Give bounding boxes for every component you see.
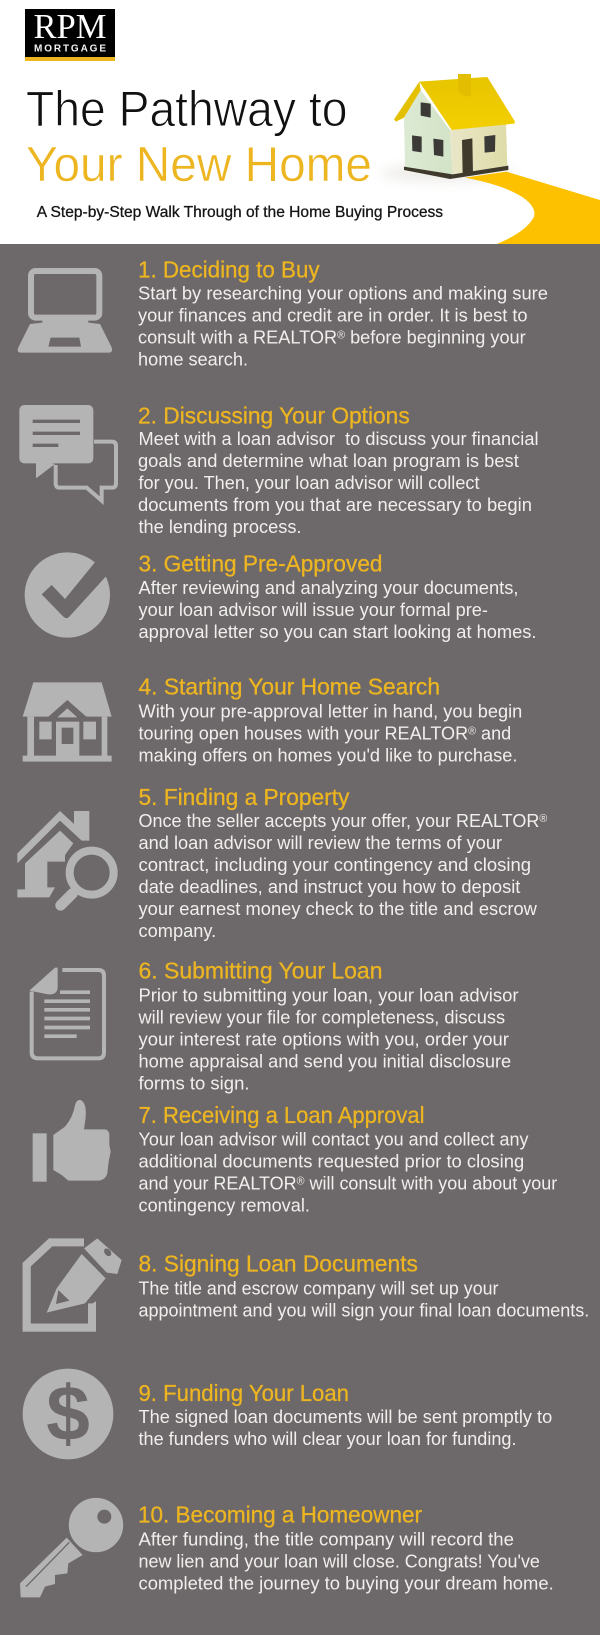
heading: 3. Getting Pre-Approved [138,551,382,577]
body text: and loan advisor will review the terms of your [138,832,502,853]
body text [138,1406,552,1449]
step 10: Becoming a Homeowner [20,1497,554,1597]
step 1: Deciding to Buy [18,256,548,369]
body text: home search. [138,348,248,369]
body text: Prior to submitting your loan, your loan advisor [138,984,518,1005]
heading: 6. Submitting Your Loan [138,958,382,984]
body text: will consult with you about your [305,1172,557,1193]
subtitle: A Step-by-Step Walk Through of the Home Buying Process [37,204,443,221]
body text [138,282,548,369]
body text: your loan advisor will issue your formal pre- [138,599,488,620]
body text: contract, including your contingency and closing [138,854,531,875]
icon: key [20,1497,124,1597]
body text [138,1528,554,1593]
panel: header [0,0,600,244]
body text: for you. Then, your loan advisor will collect [138,472,480,493]
body text: documents from you that are necessary to begin [138,494,532,515]
logo: RPM Mortgage [25,7,115,61]
body text [138,700,522,765]
step 5: Finding a Property [17,784,547,941]
body text: the lending process. [138,516,302,537]
body text: appointment and you will sign your final loan documents. [138,1299,589,1320]
body text: and your REALTOR [138,1172,301,1193]
body text: ® [297,1175,305,1187]
body text: consult with a REALTOR [138,326,341,347]
body text: and [476,722,511,743]
body text [138,1128,557,1215]
body text: your interest rate options with you, order your [138,1028,509,1049]
body text: Once the seller accepts your offer, your REALTOR [138,810,551,831]
step 6: Submitting Your Loan [29,958,519,1093]
body text: date deadlines, and instruct you how to deposit [138,876,520,897]
body text [138,984,518,1093]
body text: contingency removal. [138,1194,310,1215]
icon: speech bubbles [19,405,116,501]
title: The Pathway to [26,81,348,137]
body text: ® [539,813,547,825]
step 4: Starting Your Home Search [23,673,522,765]
body text: additional documents requested prior to closing [138,1150,524,1171]
icon: house [23,682,112,762]
title [26,81,372,192]
body text: company. [138,920,216,941]
heading: 4. Starting Your Home Search [138,673,440,699]
body text [138,1277,589,1320]
body text [138,577,536,642]
body text: Your loan advisor will contact you and collect any [138,1128,529,1149]
title: Your New Home [26,138,372,192]
icon: house with magnifier [17,811,114,905]
heading: 9. Funding Your Loan [138,1380,349,1406]
body text [138,428,538,537]
icon: dollar coin: $ [46,1369,90,1457]
icon: check mark circle [25,552,112,638]
illustration: yellow house on path [380,74,600,244]
body text: goals and determine what loan program is best [138,450,519,471]
body text: ® [337,329,345,341]
body text: will review your file for completeness, discuss [138,1006,505,1027]
body text: before beginning your [345,326,526,347]
heading: 1. Deciding to Buy [138,256,320,282]
step 3: Getting Pre-Approved [25,551,536,642]
body text: forms to sign. [138,1072,250,1093]
body text: Start by researching your options and making sure [138,282,548,303]
body text: touring open houses with your REALTOR [138,722,476,743]
body text [138,810,547,941]
heading: 2. Discussing Your Options [138,402,410,428]
body text: After funding, the title company will record the [138,1528,514,1549]
body text: The title and escrow company will set up your [138,1277,498,1298]
body text: completed the journey to buying your dream home. [138,1572,554,1593]
logo: RPM Mortgage: MORTGAGE [34,44,106,55]
icon: thumbs up [33,1100,111,1182]
body text: Meet with a loan advisor to discuss your financial [138,428,538,449]
body text: ® [468,725,476,737]
logo: RPM Mortgage: RPM [34,7,106,46]
body text: The signed loan documents will be sent promptly to [138,1406,552,1427]
icon: dollar coin [23,1369,113,1459]
body text: your earnest money check to the title and escrow [138,898,538,919]
heading: 8. Signing Loan Documents [138,1251,418,1277]
step 7: Receiving a Loan Approval [33,1100,557,1215]
body text: With your pre-approval letter in hand, you begin [138,700,522,721]
heading: 7. Receiving a Loan Approval [138,1102,424,1128]
body text: your finances and credit are in order. It is best to [138,304,528,325]
body text: making offers on homes you'd like to purchase. [138,744,517,765]
body text: approval letter so you can start looking at homes. [138,621,536,642]
icon: laptop [18,271,112,353]
icon: pencil on note [27,1237,125,1328]
heading: 10. Becoming a Homeowner [138,1502,422,1528]
body text: the funders who will clear your loan for funding. [138,1428,516,1449]
step 8: Signing Loan Documents [27,1237,589,1328]
step 9: Funding Your Loan [23,1369,552,1459]
step 2: Discussing Your Options [19,402,538,537]
icon: document [29,968,104,1058]
heading: 5. Finding a Property [138,784,350,810]
body text: new lien and your loan will close. Congrats! You've [138,1550,540,1571]
body text: After reviewing and analyzing your documents, [138,577,518,598]
body text: home appraisal and send you initial disclosure [138,1050,511,1071]
